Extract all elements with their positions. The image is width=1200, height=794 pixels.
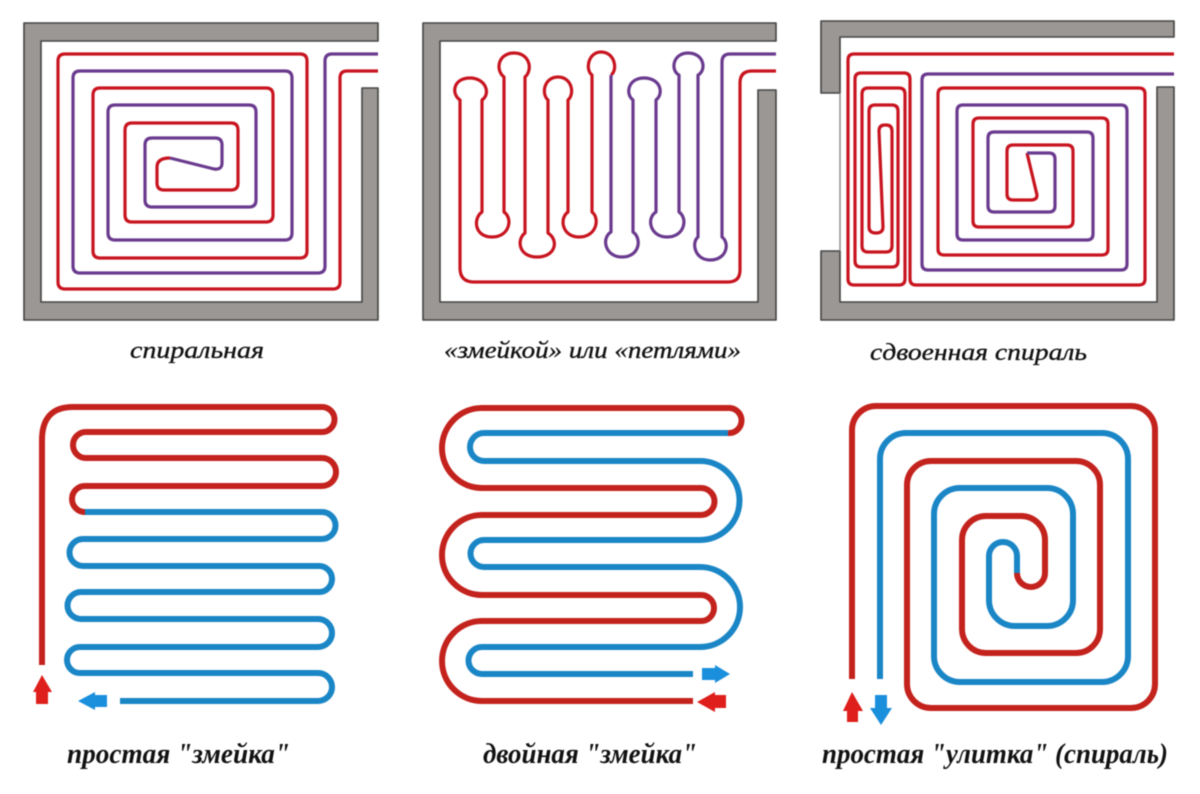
red pipe: snail (852, 406, 1155, 708)
caption: snake or loops: «змейкой» или «петлями» (444, 337, 741, 364)
blue pipe: double snake (468, 433, 740, 674)
caption: double snake: двойная "змейка" (483, 739, 697, 770)
red pipe: spiral (58, 54, 378, 289)
panel: snake or loops layout plan (423, 23, 776, 320)
arrow: red up (33, 675, 52, 704)
caption: simple snail spiral: простая "улитка" (спираль) (822, 739, 1168, 770)
red pipe: double spiral (848, 54, 1174, 285)
arrow: red up (843, 692, 863, 722)
caption: simple snake: простая "змейка" (67, 739, 290, 770)
arrow: blue down (870, 695, 892, 725)
diagram: simple snake (33, 407, 336, 710)
room walls: loops (423, 23, 776, 320)
purple pipe: loops (606, 53, 776, 260)
diagram: simple snail spiral (843, 406, 1155, 725)
red pipe: double snake (442, 408, 742, 701)
blue pipe: snail (880, 433, 1128, 682)
red pipe: simple snake (42, 407, 336, 665)
panel: double spiral layout plan (821, 21, 1174, 320)
room walls: double spiral (821, 21, 1174, 320)
panel: spiral layout plan (24, 23, 378, 320)
diagram: double snake (442, 408, 742, 712)
red pipe: loops (455, 52, 776, 282)
blue pipe: simple snake (67, 512, 336, 701)
purple pipe: double spiral (922, 74, 1174, 270)
caption: spiral: спиральная (130, 337, 264, 364)
room walls: spiral (24, 23, 378, 320)
arrow: blue left (78, 692, 107, 710)
arrow: red left (697, 692, 726, 712)
arrow: blue right (702, 665, 730, 683)
caption: double spiral: сдвоенная спираль (870, 339, 1087, 366)
purple pipe: spiral (73, 54, 378, 273)
